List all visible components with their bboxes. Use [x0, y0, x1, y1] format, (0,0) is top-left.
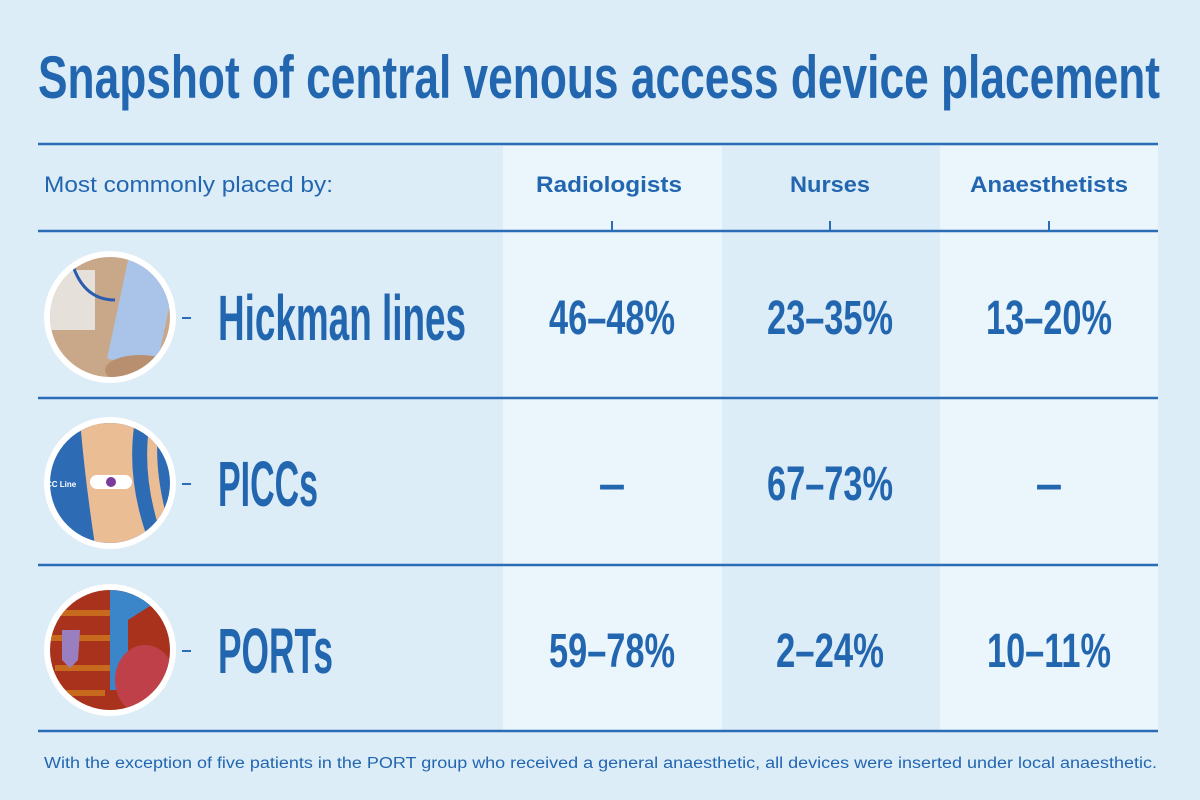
column headers — [536, 172, 1128, 197]
icon: picc — [40, 417, 180, 550]
values: 10–11% — [987, 625, 1111, 678]
row dashes — [182, 318, 191, 651]
values: 2–24% — [776, 625, 884, 678]
column headers: Anaesthetists — [970, 172, 1128, 197]
icon: hickman photo — [44, 251, 176, 383]
row labels: PICCs — [218, 448, 318, 520]
values: 23–35% — [767, 292, 893, 345]
footnote: With the exception of five patients in the PORT group who received a general anaesthetic, all devices were inserted under local anaesthetic. — [44, 755, 1157, 772]
column headers: Nurses — [790, 172, 870, 197]
values: 13–20% — [986, 292, 1112, 345]
values: 59–78% — [549, 625, 675, 678]
header label: Most commonly placed by: — [44, 172, 333, 197]
column shading: anaesthetists — [940, 146, 1158, 731]
row labels: PORTs — [218, 615, 333, 687]
column shading: radiologists — [503, 146, 722, 731]
values: – — [1036, 458, 1062, 511]
row labels — [218, 282, 466, 687]
values — [549, 292, 1112, 678]
icon: picc: CC Line — [46, 480, 77, 489]
values: 46–48% — [549, 292, 675, 345]
column headers: Radiologists — [536, 172, 682, 197]
icon: port — [40, 584, 180, 716]
values: – — [599, 458, 625, 511]
row labels: Hickman lines — [218, 282, 466, 354]
values: 67–73% — [767, 458, 893, 511]
